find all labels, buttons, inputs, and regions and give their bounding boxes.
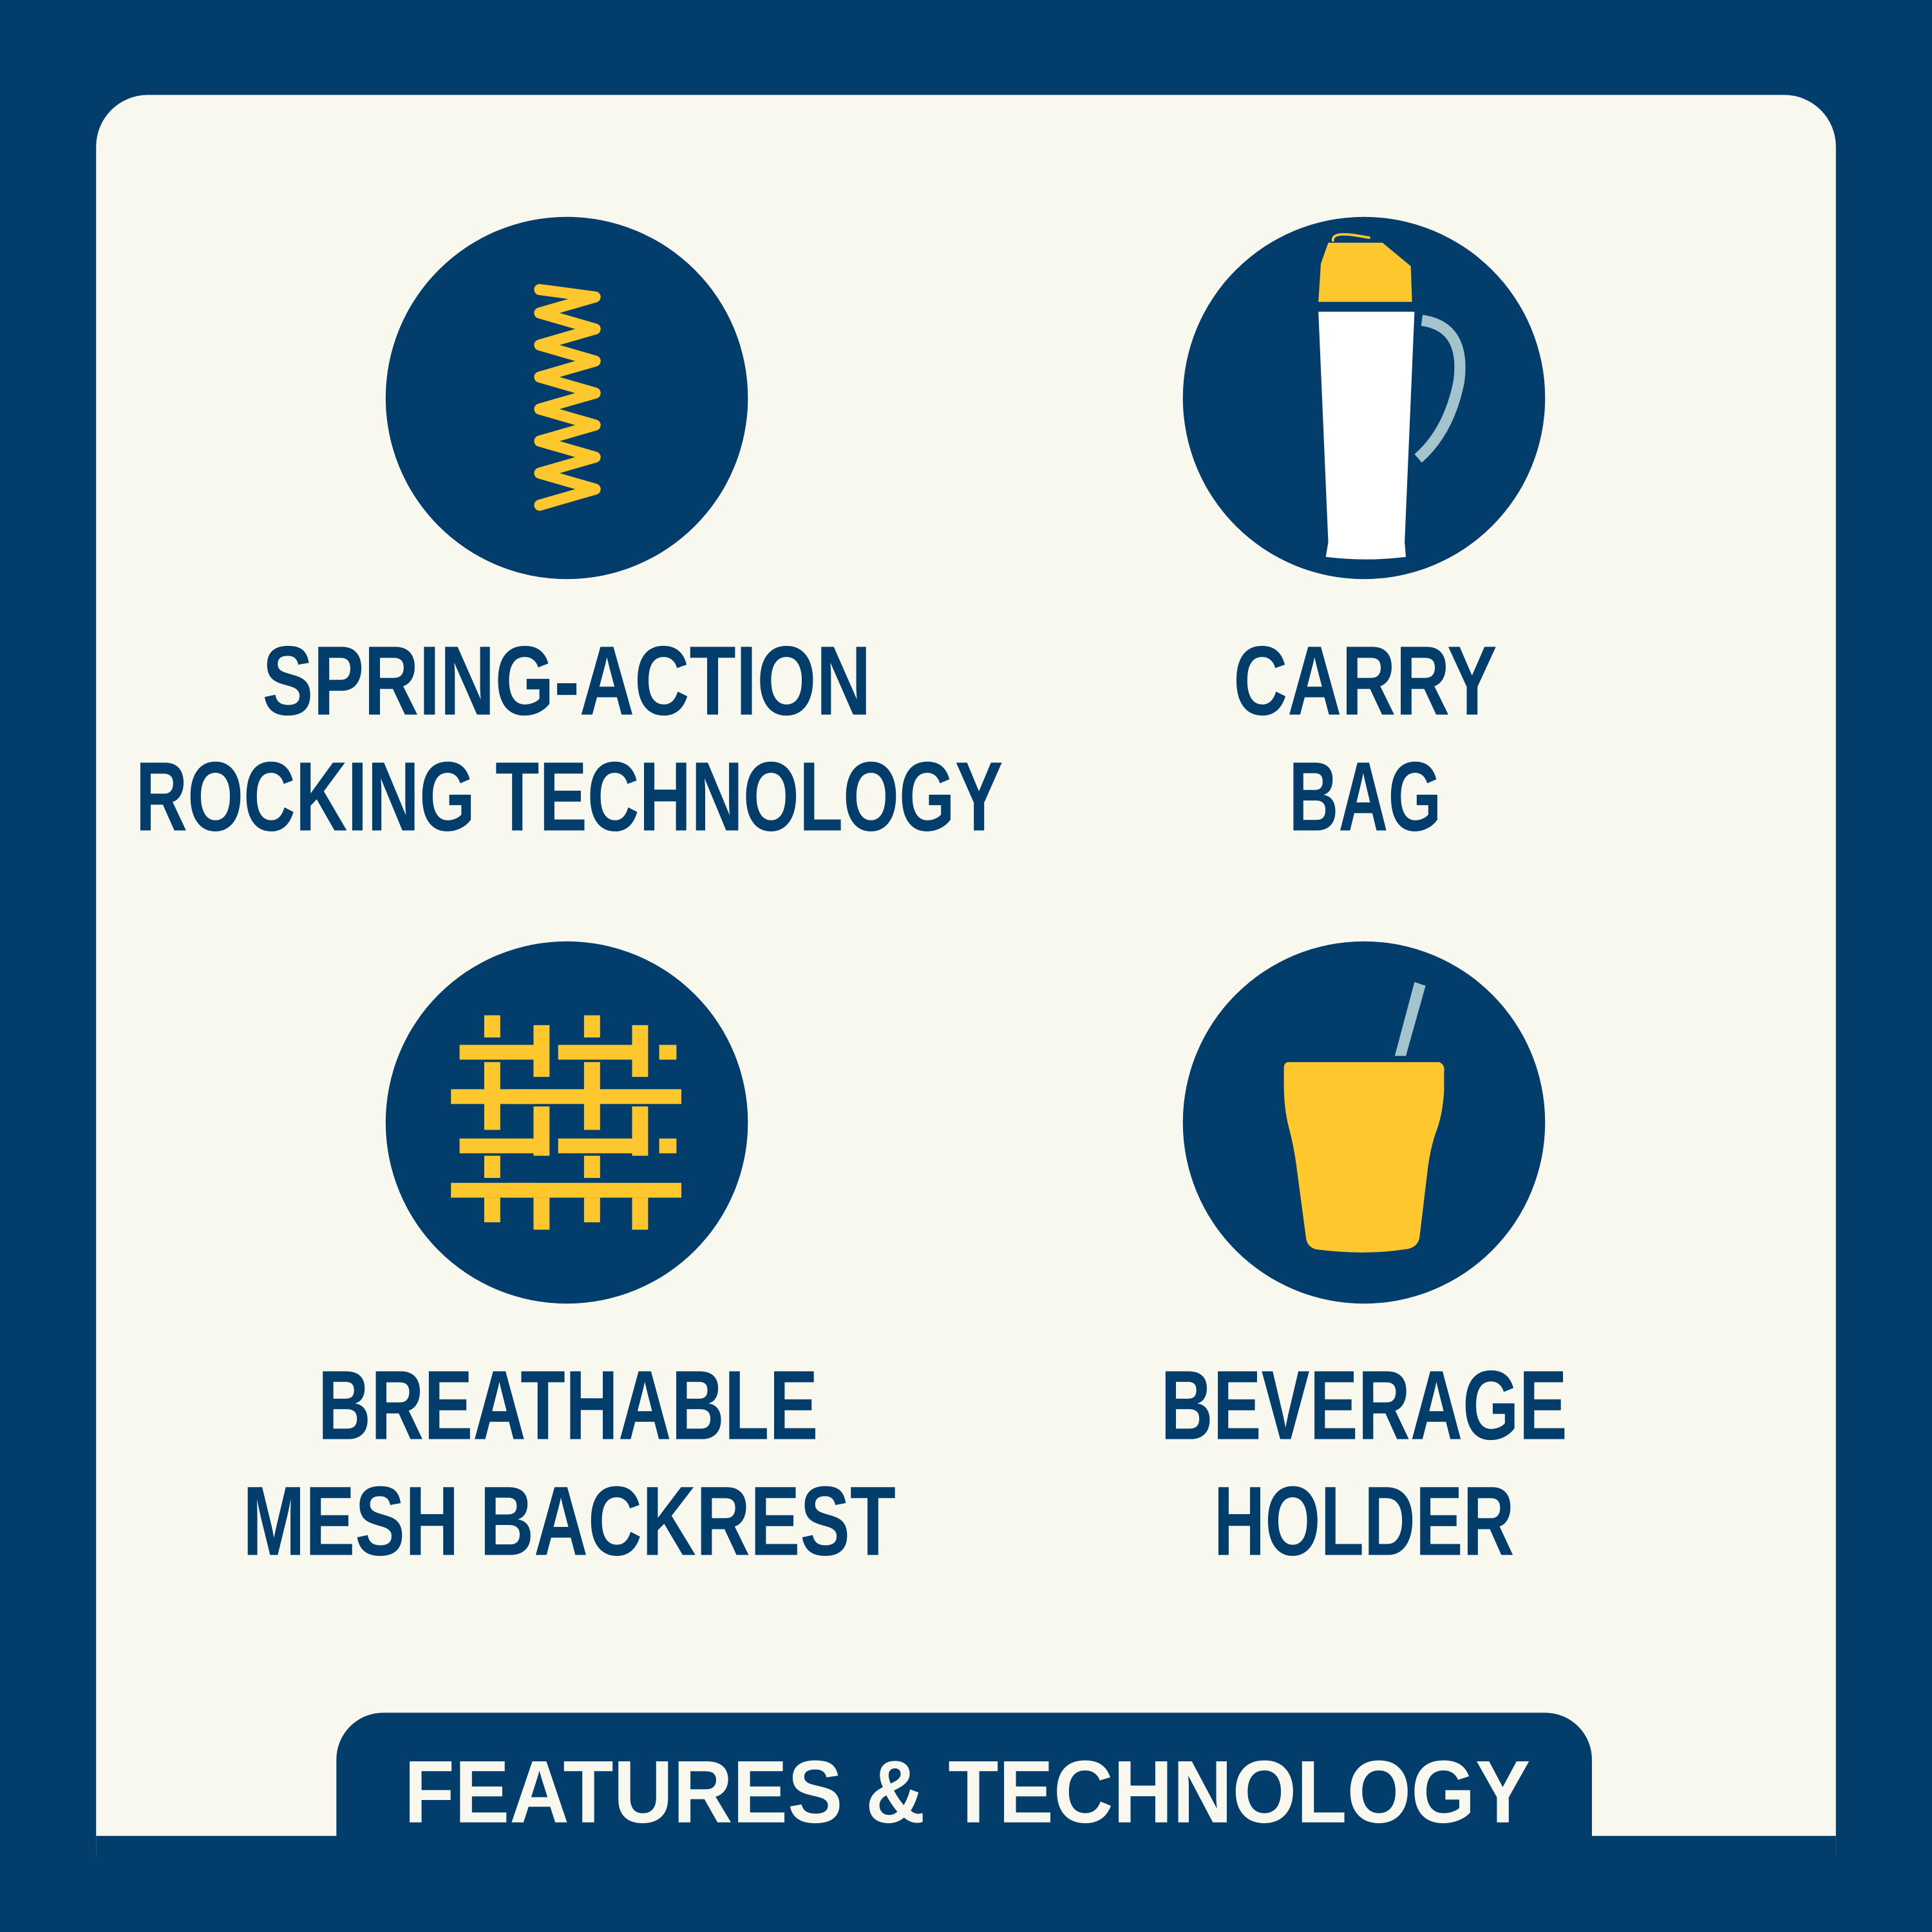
text: breathable mesh backrest (243, 1350, 896, 1577)
text: spring-action rocking technology: SPRING-ACTION (263, 626, 871, 736)
text: carry bag: BAG (1289, 742, 1442, 852)
icon: beverage cup circle (1183, 942, 1545, 1303)
icon: spring circle (386, 217, 748, 579)
text: beverage holder: HOLDER (1214, 1466, 1514, 1577)
text: breathable mesh backrest: BREATHABLE (318, 1350, 818, 1461)
icon: carry bag thermos circle (1183, 217, 1545, 579)
icon: mesh circle (386, 942, 748, 1303)
text: carry bag: CARRY (1233, 626, 1497, 736)
footer tab: features & technology (336, 1712, 1592, 1932)
text: beverage holder (1160, 1350, 1567, 1577)
text: carry bag (1233, 626, 1497, 852)
text: spring-action rocking technology (135, 626, 1003, 852)
footer tab: features & technology: FEATURES & TECHNOLOGY (404, 1743, 1530, 1842)
text: spring-action rocking technology: ROCKING TECHNOLOGY (135, 742, 1003, 852)
text: breathable mesh backrest: MESH BACKREST (243, 1466, 896, 1577)
text: beverage holder: BEVERAGE (1160, 1350, 1567, 1461)
